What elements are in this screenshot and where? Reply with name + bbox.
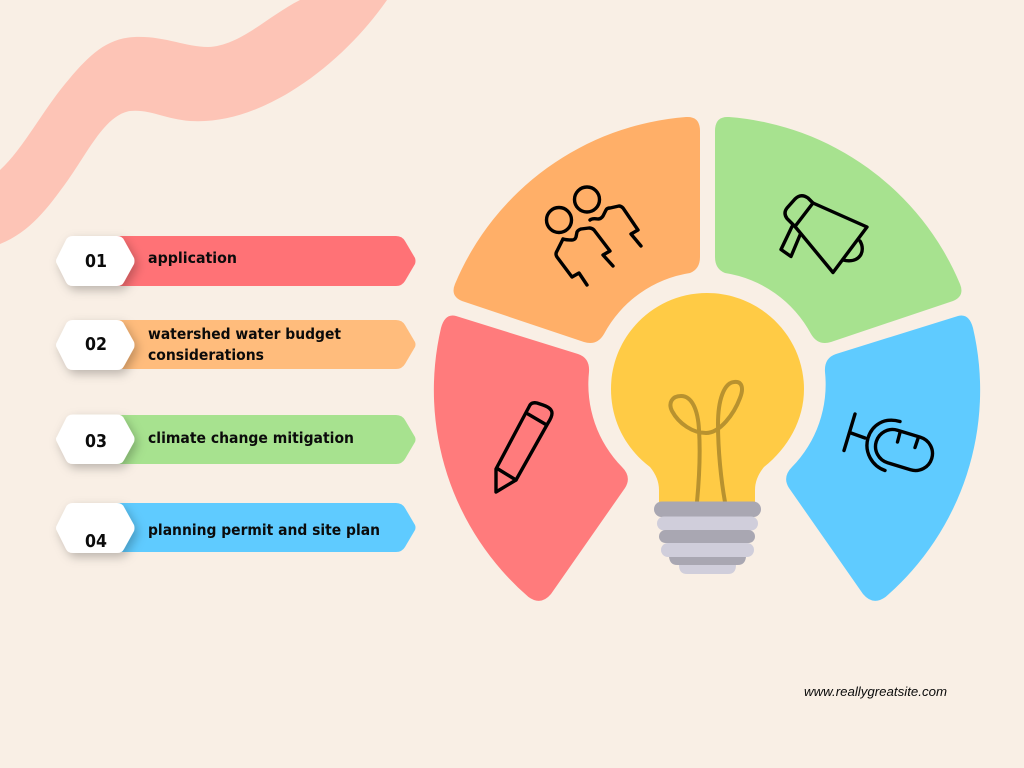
bar: planning <box>100 503 416 552</box>
badge 04: 04 <box>85 531 107 552</box>
badge 01: 01 <box>85 251 107 272</box>
bar: watershed <box>100 320 416 369</box>
filament <box>670 382 742 502</box>
decorative wave <box>0 0 387 244</box>
badge 02 <box>56 320 134 370</box>
badge 02: 02 <box>85 334 107 355</box>
label: planning permit and site plan: planning permit and site plan <box>148 521 380 539</box>
label: watershed water budget considerations: considerations <box>148 346 264 364</box>
label: watershed water budget considerations: watershed water budget <box>148 325 342 343</box>
icon: megaphone <box>781 196 867 272</box>
bar: application <box>100 236 416 286</box>
screw base <box>654 502 761 574</box>
segment: blue <box>786 316 980 601</box>
badge 04 <box>56 503 134 553</box>
segment: green <box>715 117 961 343</box>
badge 01 <box>56 236 134 286</box>
light bulb <box>611 293 804 574</box>
icon: pencil <box>496 403 552 492</box>
segment: red <box>434 316 628 601</box>
item 01 <box>56 236 416 286</box>
badge 03: 03 <box>85 431 107 452</box>
item 02 <box>56 320 416 370</box>
bulb glass <box>611 293 804 503</box>
item 04 <box>56 503 416 553</box>
label: application: application <box>148 249 237 267</box>
badge 03 <box>56 414 134 464</box>
segment: orange <box>454 117 700 343</box>
label: climate change mitigation: climate change mitigation <box>148 429 354 447</box>
bar: climate <box>100 415 416 464</box>
item 03 <box>56 414 416 464</box>
icon: microphone <box>844 414 937 475</box>
icon: people <box>546 187 641 285</box>
website url: www.reallygreatsite.com <box>804 685 947 699</box>
